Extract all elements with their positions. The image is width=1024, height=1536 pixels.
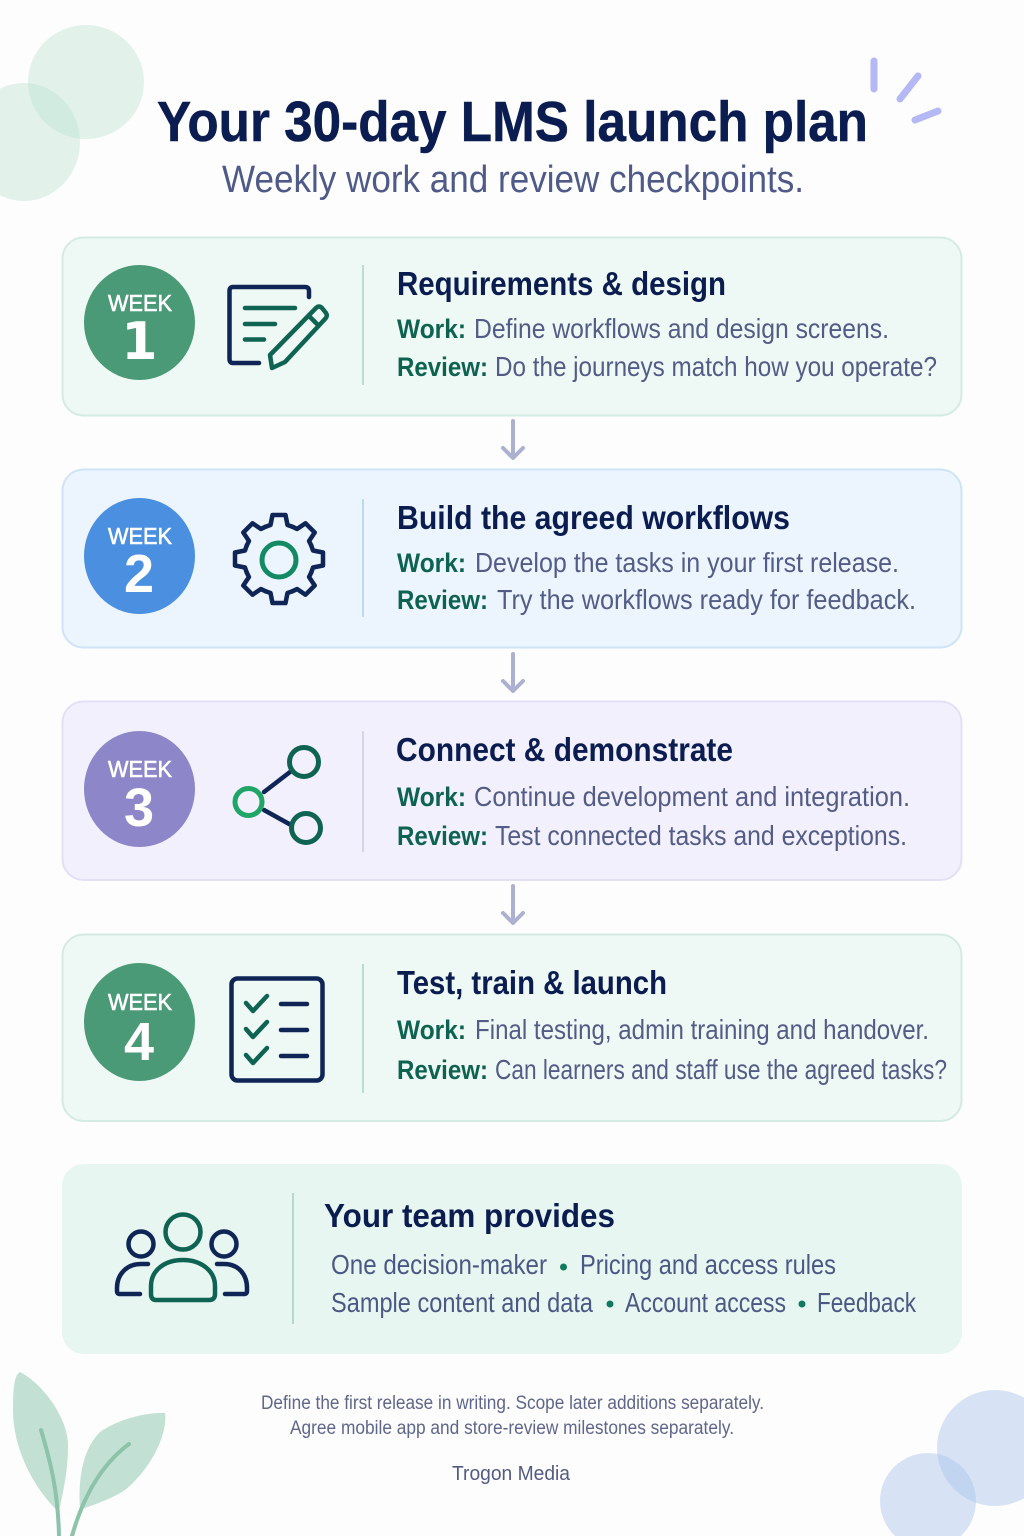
week 3 review line: Test connected tasks and exceptions.: [495, 820, 907, 851]
title: Your 30-day LMS launch plan: [157, 90, 868, 154]
team list row 2: Account access: [625, 1287, 786, 1318]
credit: Trogon Media: [452, 1463, 571, 1485]
icon: connected nodes: [235, 748, 320, 842]
arrow: week 3 to week 4: [503, 886, 523, 923]
week 3 badge: 3: [124, 778, 154, 838]
team list row 1: [331, 1249, 836, 1280]
week 2 badge: [84, 498, 195, 614]
week 3 work line: Continue development and integration.: [474, 781, 910, 812]
week 4 work line: Final testing, admin training and handover.: [475, 1014, 929, 1045]
week 1 work line: Work:: [397, 314, 466, 344]
panel: week 3: [62, 702, 962, 880]
week 2 badge: 2: [124, 544, 154, 604]
team list row 1: One decision-maker: [331, 1249, 547, 1280]
week 2 work line: Develop the tasks in your first release.: [475, 547, 899, 578]
footer note: Define the first release in writing. Scope later additions separately.: [261, 1393, 764, 1414]
week 2 heading: Build the agreed workflows: [397, 499, 790, 536]
footer note: Agree mobile app and store-review milestones separately.: [290, 1418, 734, 1439]
team list row 2: Sample content and data: [331, 1287, 593, 1318]
icon: checklist: [232, 978, 322, 1080]
week 1 badge: WEEK: [108, 290, 173, 316]
week 2 badge: WEEK: [108, 523, 173, 549]
decorative leaves bottom left: [13, 1372, 165, 1536]
icon: team of people: [117, 1214, 247, 1300]
decorative circles top left: [0, 25, 144, 201]
divider: [292, 1193, 294, 1324]
divider: [362, 964, 364, 1093]
week 3 badge: WEEK: [108, 756, 173, 782]
week 1 work line: Define workflows and design screens.: [474, 313, 889, 344]
week 1 heading: Requirements & design: [397, 265, 726, 302]
week 4 review line: Review:: [397, 1055, 488, 1085]
week 1 badge: 1: [121, 312, 158, 372]
week 4 work line: Work:: [397, 1015, 466, 1045]
team list row 1: Pricing and access rules: [580, 1249, 836, 1280]
divider: [362, 731, 364, 852]
team heading: Your team provides: [324, 1197, 615, 1234]
week 1 review line: Review:: [397, 352, 488, 382]
week 1 badge: [84, 265, 195, 380]
week 3 work line: Work:: [397, 782, 466, 812]
week 4 badge: 4: [124, 1012, 154, 1072]
week 3 badge: [84, 731, 195, 847]
week 1 review line: Do the journeys match how you operate?: [495, 351, 937, 382]
divider: [362, 265, 364, 385]
divider: [362, 499, 364, 617]
week 3 heading: Connect & demonstrate: [396, 731, 733, 768]
subtitle: Weekly work and review checkpoints.: [222, 159, 804, 201]
week 4 badge: WEEK: [108, 989, 173, 1015]
panel: week 4: [62, 934, 962, 1121]
week 2 review line: Review:: [397, 585, 488, 615]
panel: week 1: [62, 238, 962, 416]
icon: gear: [235, 515, 323, 603]
team list row 2: Feedback: [817, 1287, 917, 1318]
arrow: week 1 to week 2: [503, 421, 523, 458]
panel: your team provides: [62, 1164, 962, 1354]
footer note: [261, 1393, 764, 1439]
icon: document and pencil: [230, 287, 327, 368]
panel: week 2: [62, 470, 962, 648]
week 4 heading: Test, train & launch: [397, 964, 667, 1001]
week 3 review line: Review:: [397, 821, 488, 851]
team list row 2: [331, 1287, 917, 1318]
week 4 badge: [84, 963, 195, 1081]
decorative circles bottom right: [880, 1390, 1024, 1536]
arrow: week 2 to week 3: [503, 654, 523, 691]
week 2 review line: Try the workflows ready for feedback.: [497, 584, 916, 615]
decorative sparkle lines: [874, 61, 938, 120]
week 2 work line: Work:: [397, 548, 466, 578]
